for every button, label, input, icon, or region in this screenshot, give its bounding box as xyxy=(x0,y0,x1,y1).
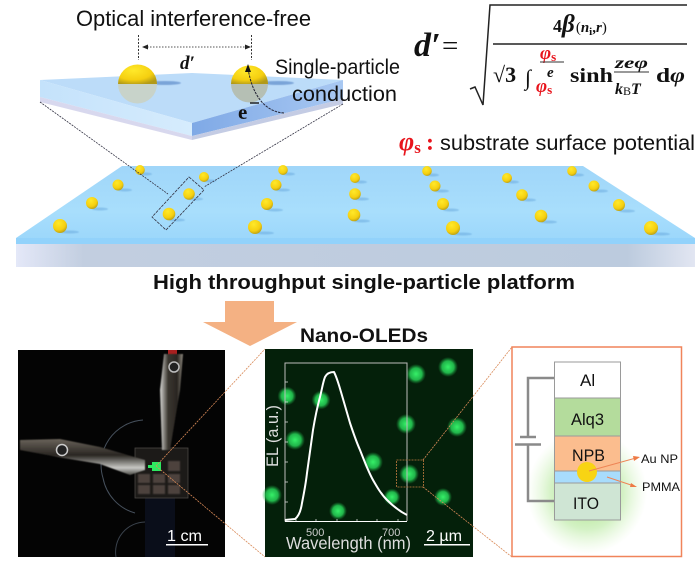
callout arrows xyxy=(589,458,636,486)
equation for d': ∫ xyxy=(523,65,533,91)
title: optical interference-free: Optical interference-free xyxy=(76,6,311,31)
label: single-particle conduction xyxy=(275,56,400,106)
panel: device stack xyxy=(512,347,682,556)
scale bar: 2 µm: 2 µm xyxy=(426,528,462,545)
panel: device stack: NPB xyxy=(572,447,605,465)
green emission glow xyxy=(527,430,647,554)
heading: high throughput platform: High throughput single-particle platform xyxy=(153,272,575,294)
equation for d': s xyxy=(551,49,556,64)
equation for d': φ xyxy=(536,76,547,97)
substrate surface potential note: substrate surface potential xyxy=(440,132,695,155)
panel: device stack: Au NP xyxy=(641,452,678,466)
equation for d': k xyxy=(615,81,623,98)
magnified substrate block with two particles xyxy=(40,65,343,140)
equation for d': = xyxy=(442,30,458,62)
distance marker d': d′ xyxy=(180,53,195,74)
particle shadows xyxy=(61,172,670,236)
gold particles xyxy=(53,165,658,235)
equation for d': e xyxy=(547,65,554,81)
electron path arrow xyxy=(238,64,284,124)
equation for d': s xyxy=(547,82,552,97)
circuit wiring xyxy=(515,378,554,501)
electron path arrow: e xyxy=(238,100,247,124)
substrate surface potential note xyxy=(399,127,695,157)
gold nanoparticle xyxy=(577,462,597,482)
scale bar: 1 cm: 1 cm xyxy=(167,528,202,545)
panel: device stack: Alq3 xyxy=(571,411,604,429)
equation for d': B xyxy=(623,84,631,98)
panel: device stack: ITO xyxy=(573,495,599,513)
spectrum inset xyxy=(263,363,411,553)
substrate surface potential note: s xyxy=(414,138,421,157)
equation for d': 4β(n xyxy=(553,11,589,38)
platform slab with particle array xyxy=(16,165,695,267)
heading: nano-OLEDs: Nano-OLEDs xyxy=(300,325,428,347)
equation for d': , xyxy=(592,20,596,36)
equation for d': sinh xyxy=(570,65,613,87)
arrow: down xyxy=(203,301,297,346)
equation for d' xyxy=(414,5,687,105)
equation for d': i xyxy=(589,26,592,38)
equation for d': r) xyxy=(596,20,607,36)
emission spots xyxy=(262,357,467,520)
selection box xyxy=(396,460,424,487)
panel: device stack: PMMA xyxy=(642,480,680,494)
zoom selection box and guide lines xyxy=(40,102,343,230)
distance marker d' xyxy=(138,35,252,74)
photo: device with clips xyxy=(18,350,225,557)
label: single-particle conduction: Single-particle xyxy=(275,56,400,79)
equation for d': d′ xyxy=(414,27,441,64)
orange zoom guide lines xyxy=(156,347,512,557)
equation for d': √3 xyxy=(493,62,516,87)
spectrum inset: 700 xyxy=(382,527,400,539)
layers xyxy=(554,362,620,520)
equation for d': T xyxy=(631,81,642,98)
spectrum inset: EL (a.u.) xyxy=(263,405,282,467)
spectrum inset: Wavelength (nm) xyxy=(286,533,411,553)
equation for d': φ xyxy=(540,43,551,64)
EL micrograph with spectrum inset xyxy=(262,349,473,557)
equation for d': dφ xyxy=(656,65,685,87)
panel: device stack: Al xyxy=(580,371,595,390)
equation for d': zeφ xyxy=(614,55,648,72)
label: single-particle conduction: conduction xyxy=(292,83,397,106)
substrate surface potential note: φ xyxy=(399,127,414,156)
spectrum inset: 500 xyxy=(306,527,324,539)
substrate surface potential note: : xyxy=(426,130,434,156)
